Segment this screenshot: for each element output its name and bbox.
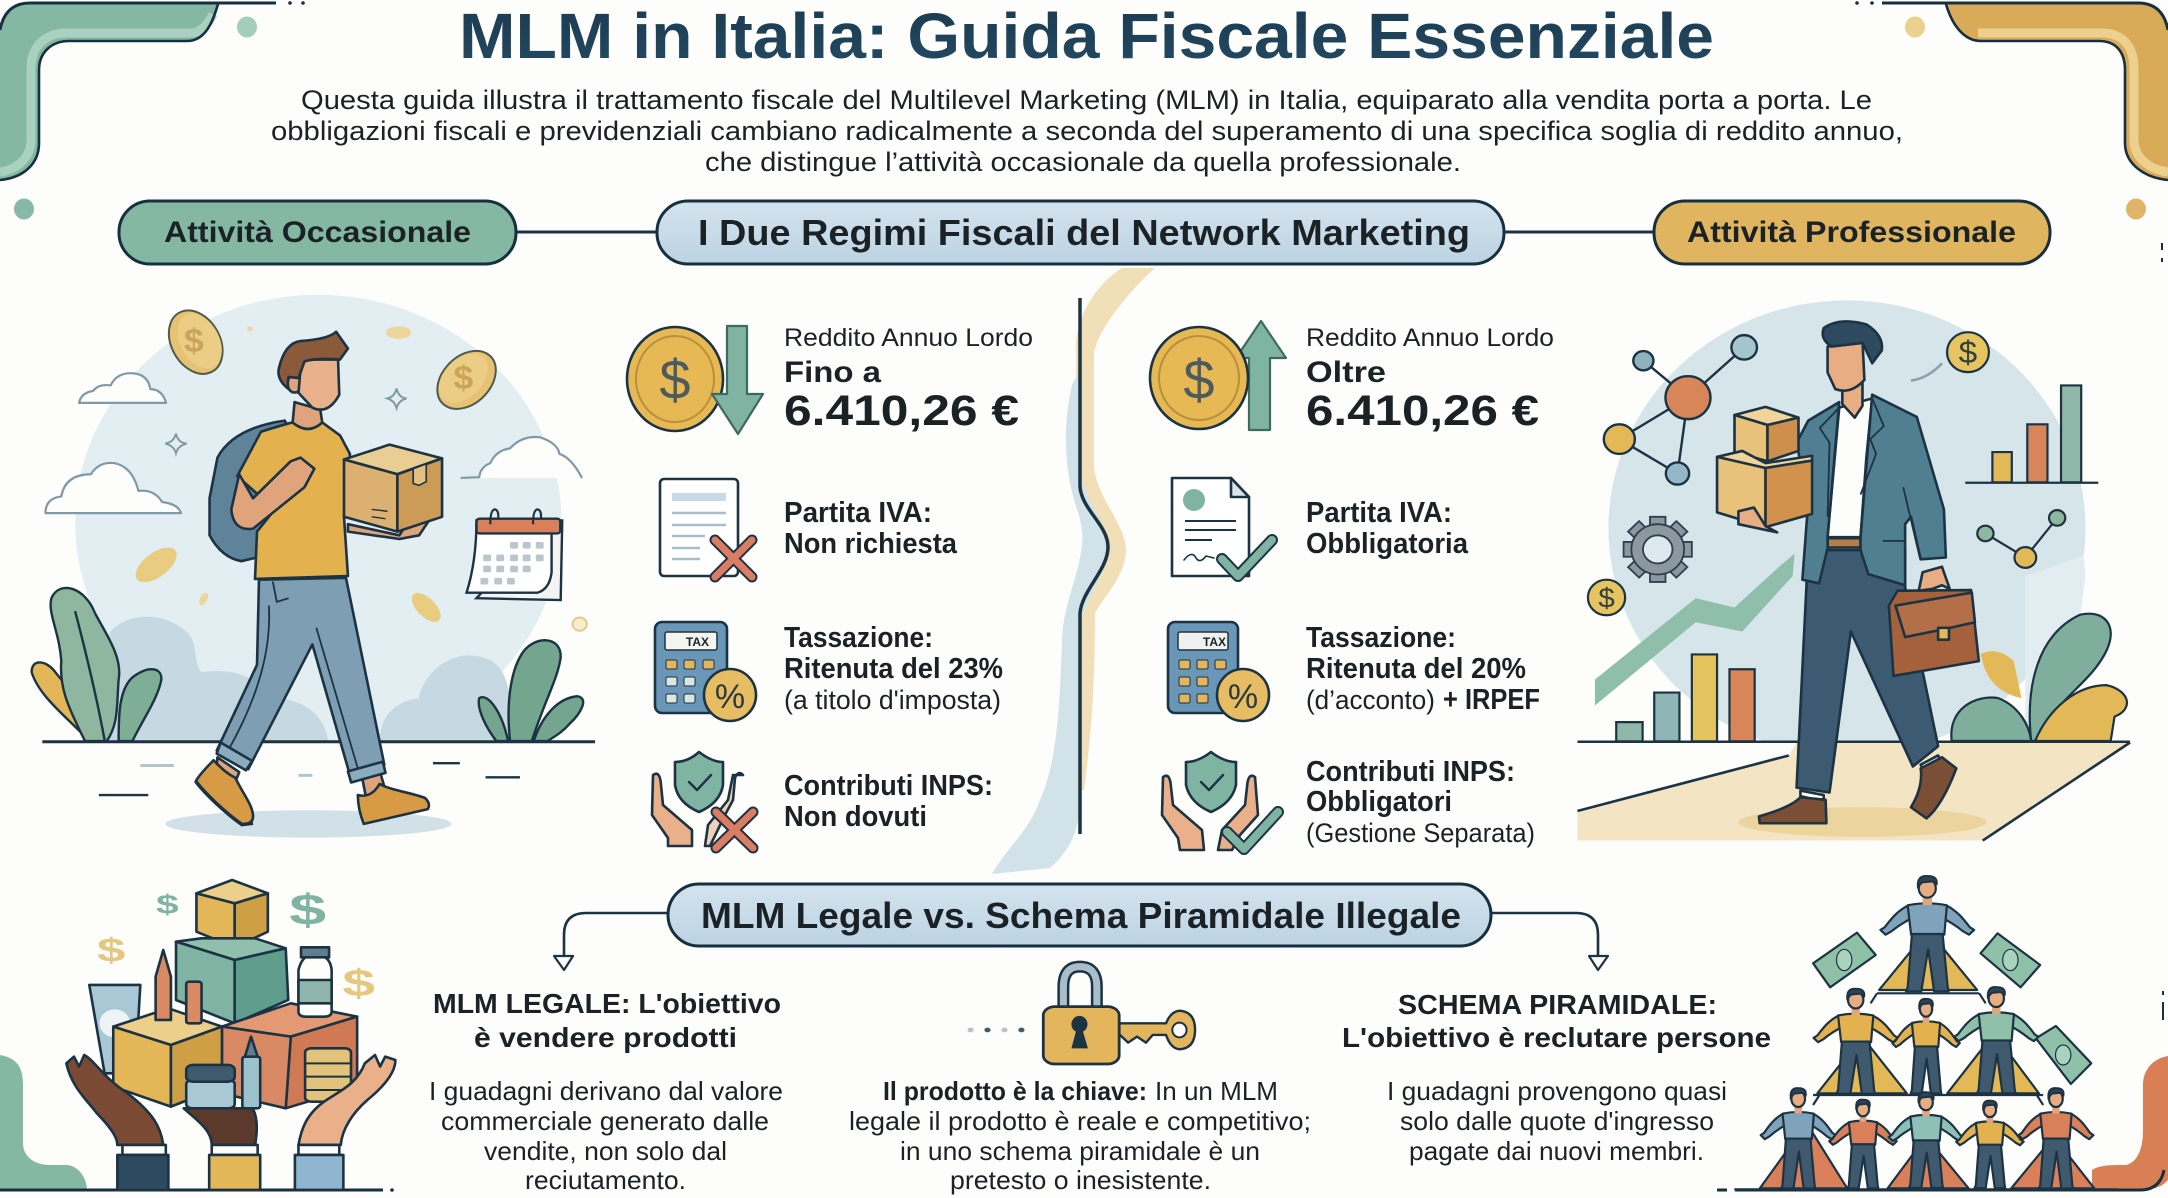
- text: reddito oltre: [1306, 324, 1554, 435]
- text: reddito fino a: 6.410,26 €: [784, 387, 1019, 435]
- text: tassazione ritenuta 23%: [784, 622, 1003, 715]
- text: tassazione ritenuta 20%: Ritenuta del 20%: [1306, 653, 1526, 685]
- network nodes: [1604, 335, 1757, 485]
- text: partita IVA obbligatoria: Obbligatoria: [1306, 528, 1469, 560]
- text: tassazione ritenuta 20%: [1306, 622, 1540, 716]
- arrow to legal MLM: [554, 913, 668, 970]
- connector lines between header pills: [516, 230, 1654, 234]
- coin with down arrow icon: [627, 326, 763, 434]
- text: reddito fino a: Fino a: [784, 356, 881, 389]
- dollar signs: $: [156, 890, 179, 920]
- pyramid triangles: [1734, 930, 2118, 1189]
- people bottom tier: [1761, 1088, 2093, 1188]
- floating coins: $: [454, 360, 473, 397]
- section pill: MLM Legale vs Schema Piramidale Illegale: [668, 884, 1491, 946]
- icon: tax calculator 23%: [655, 622, 756, 721]
- icon: tax calculator 20%: TAX: [1203, 635, 1226, 649]
- text: contributi INPS obbligatori: (Gestione Separata): [1306, 818, 1535, 848]
- text: contributi INPS non dovuti: [784, 770, 993, 833]
- text: partita IVA non richiesta: [784, 497, 958, 560]
- text: contributi INPS non dovuti: Non dovuti: [784, 801, 927, 833]
- text: partita IVA obbligatoria: Partita IVA:: [1306, 497, 1452, 529]
- text: reddito fino a: Reddito Annuo Lordo: [784, 324, 1033, 352]
- clouds: [45, 373, 582, 513]
- intro text: [271, 85, 1903, 177]
- text: tassazione ritenuta 20%: + IRPEF: [1443, 684, 1540, 716]
- text: tassazione ritenuta 20%: (d’acconto): [1306, 685, 1435, 715]
- central divider with ribbon: [992, 268, 1155, 874]
- text: MLM legale: reciutamento.: [525, 1165, 686, 1195]
- background circle: [1608, 300, 2085, 755]
- plants: [1951, 614, 2127, 741]
- text: schema piramidale: SCHEMA PIRAMIDALE:: [1398, 989, 1717, 1020]
- icon: document with cross: [660, 479, 752, 577]
- text: contributi INPS obbligatori: Contributi INPS:: [1306, 756, 1515, 788]
- text: MLM legale: vendite, non solo dal: [484, 1136, 727, 1166]
- dollar signs: $: [289, 886, 326, 934]
- illustration: occasional seller walking: [32, 295, 595, 838]
- illustration: professional with briefcase: [1577, 300, 2130, 841]
- text: schema piramidale: I guadagni provengono quasi: [1387, 1076, 1727, 1106]
- text: tassazione ritenuta 23%: Tassazione:: [784, 622, 933, 654]
- small network: [1977, 510, 2065, 568]
- growth arrow: [1595, 554, 1795, 706]
- text: contributi INPS non dovuti: Contributi INPS:: [784, 770, 993, 802]
- plants: [32, 588, 583, 741]
- text: il prodotto è la chiave: In un MLM: [1155, 1076, 1278, 1106]
- icon: lock and key: [967, 967, 1195, 1064]
- intro text: Questa guida illustra il trattamento fiscale del Multilevel Marketing (MLM) in Italia, equiparato alla vendita porta a porta. Le: [301, 85, 1872, 115]
- decorative corner: bottom left: [0, 1055, 394, 1192]
- bar charts: [1616, 385, 2098, 741]
- text: reddito oltre: Reddito Annuo Lordo: [1306, 324, 1554, 352]
- text: MLM legale: è vendere prodotti: [474, 1022, 737, 1053]
- text: contributi INPS obbligatori: Obbligatori: [1306, 786, 1452, 818]
- text: MLM legale: [429, 988, 783, 1195]
- ground: [42, 740, 595, 743]
- text: tassazione ritenuta 23%: Ritenuta del 23%: [784, 653, 1003, 685]
- figure: [1717, 321, 1979, 823]
- background circle and hills: [75, 295, 561, 750]
- hands: [66, 1055, 395, 1190]
- icon: shield hands with check: [1162, 752, 1278, 850]
- people middle tier: [1814, 987, 2038, 1094]
- text: reddito oltre: 6.410,26 €: [1306, 387, 1539, 435]
- pill: Attività Professionale: Attività Professionale: [1687, 216, 2016, 249]
- icon: tax calculator 20%: %: [1228, 678, 1258, 716]
- text: partita IVA non richiesta: Partita IVA:: [784, 497, 932, 529]
- people top tier: [1880, 876, 1974, 991]
- dollar signs: [97, 886, 375, 1004]
- floating coins: $: [184, 323, 204, 360]
- dollar signs: $: [97, 932, 125, 969]
- text: schema piramidale: [1342, 989, 1771, 1166]
- text: partita IVA obbligatoria: [1306, 497, 1469, 560]
- title: MLM in Italia: Guida Fiscale Essenziale: [459, 0, 1714, 72]
- text: tassazione ritenuta 20%: Tassazione:: [1306, 622, 1456, 654]
- decorative corner: top left: [0, 1, 305, 220]
- pill: I Due Regimi Fiscali del Network Marketing: [657, 201, 1504, 264]
- decorative corner: bottom right: [1717, 991, 2168, 1190]
- text: il prodotto è la chiave: in uno schema piramidale è un: [900, 1136, 1260, 1166]
- icon: tax calculator 23%: %: [715, 678, 745, 716]
- floor: [1577, 742, 2130, 841]
- text: schema piramidale: L'obiettivo è reclutare persone: [1342, 1022, 1771, 1053]
- illustration: pyramid scheme: [1734, 876, 2118, 1189]
- icon: tax calculator 23%: TAX: [686, 635, 709, 649]
- gear: [1624, 517, 1692, 582]
- floating coins: [129, 302, 587, 631]
- dollar coins: $: [1959, 334, 1977, 370]
- icon: shield hands with cross: [652, 752, 753, 848]
- pill: Attività Occasionale: [119, 201, 516, 264]
- text: il prodotto è la chiave: [849, 1076, 1311, 1195]
- text: MLM legale: I guadagni derivano dal valore: [429, 1076, 783, 1106]
- text: reddito oltre: Oltre: [1306, 356, 1386, 389]
- coin with up arrow icon: [1150, 321, 1286, 430]
- text: il prodotto è la chiave: pretesto o inesistente.: [950, 1165, 1211, 1195]
- text: contributi INPS obbligatori: [1306, 756, 1535, 848]
- pill: Attività Occasionale: Attività Occasionale: [164, 216, 471, 249]
- text: MLM legale: MLM LEGALE: L'obiettivo: [433, 988, 781, 1019]
- intro text: che distingue l’attività occasionale da quella professionale.: [705, 147, 1461, 177]
- icon: tax calculator 20%: [1168, 622, 1269, 721]
- illustration: hands holding products: [66, 880, 395, 1190]
- icon: signed document with check: [1172, 478, 1272, 576]
- coin with up arrow icon: $: [1183, 348, 1215, 411]
- text: schema piramidale: solo dalle quote d'ingresso: [1400, 1106, 1714, 1136]
- sparkles: [165, 388, 406, 453]
- pill: Attività Professionale: [1654, 201, 2050, 264]
- text: partita IVA non richiesta: Non richiesta: [784, 528, 958, 560]
- figure: [196, 332, 442, 825]
- arrow to pyramid scheme: [1491, 913, 1608, 970]
- text: schema piramidale: pagate dai nuovi membri.: [1409, 1136, 1704, 1166]
- dollar signs: $: [342, 961, 375, 1004]
- text: il prodotto è la chiave: Il prodotto è la chiave:: [883, 1076, 1147, 1106]
- text: il prodotto è la chiave: legale il prodotto è reale e competitivo;: [849, 1106, 1311, 1136]
- dollar coins: $: [1598, 583, 1615, 614]
- text: MLM legale: commerciale generato dalle: [441, 1106, 769, 1136]
- decorative corner: top right: [1855, 1, 2168, 262]
- dollar coins: [1588, 332, 1989, 615]
- text: reddito fino a: [784, 324, 1033, 435]
- intro text: obbligazioni fiscali e previdenziali cambiano radicalmente a seconda del superamento di una specifica soglia di reddito annuo,: [271, 116, 1903, 146]
- banknotes: [1813, 933, 2091, 1084]
- calendar: [467, 509, 562, 600]
- pill: I Due Regimi Fiscali del Network Marketing: I Due Regimi Fiscali del Network Marketing: [698, 212, 1470, 253]
- boxes and products: [89, 880, 357, 1108]
- text: tassazione ritenuta 23%: (a titolo d'imposta): [784, 685, 1001, 715]
- section pill: MLM Legale vs Schema Piramidale Illegale: MLM Legale vs. Schema Piramidale Illegale: [701, 895, 1461, 936]
- coin with down arrow icon: $: [659, 348, 691, 411]
